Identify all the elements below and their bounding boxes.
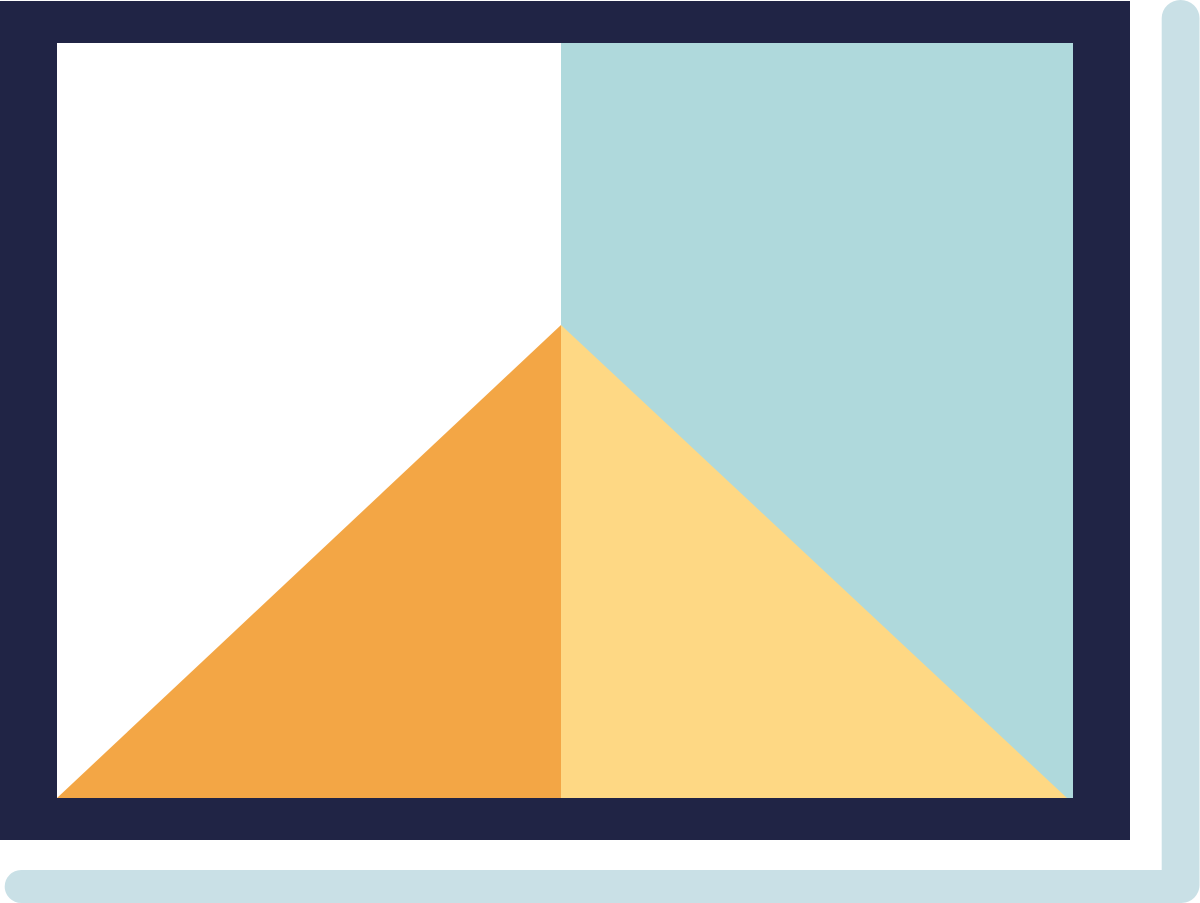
orange triangle half bbox=[57, 325, 561, 798]
teal right panel bbox=[561, 43, 1073, 798]
yellow triangle half bbox=[561, 325, 1067, 798]
white left panel bbox=[57, 43, 561, 798]
